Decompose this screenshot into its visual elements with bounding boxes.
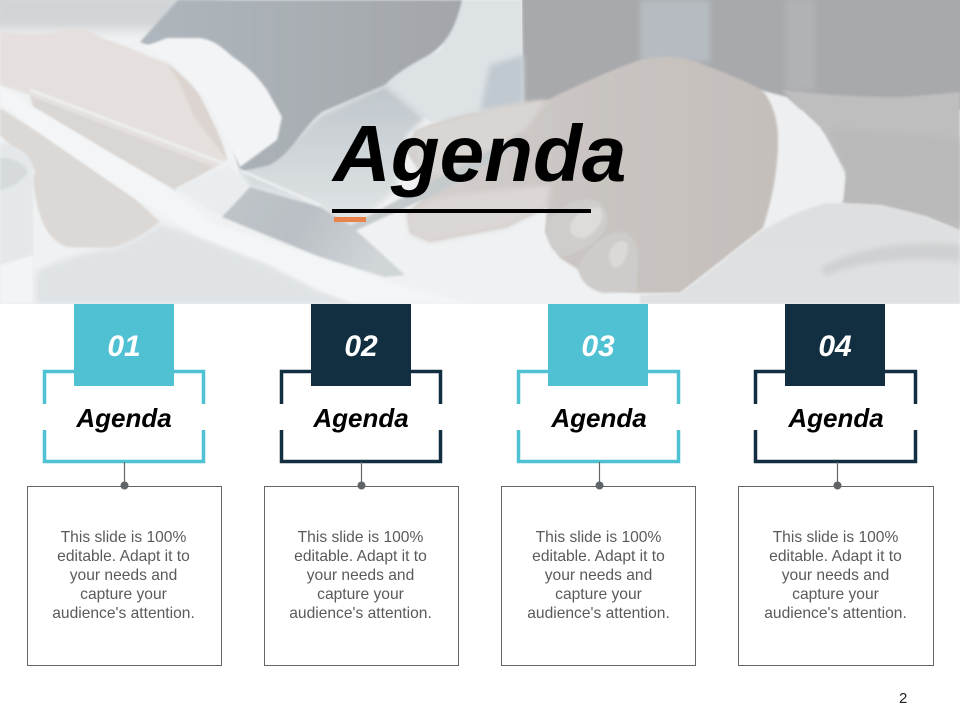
bracket bbox=[516, 370, 680, 464]
title: Agenda: Agenda bbox=[333, 109, 626, 198]
card 02 bbox=[264, 304, 459, 666]
body text: This slide is 100% bbox=[773, 528, 898, 546]
left hand back bbox=[0, 29, 227, 168]
text box bbox=[738, 486, 934, 666]
body text: your needs and bbox=[545, 566, 652, 584]
connector bbox=[120, 462, 128, 490]
card 01 bbox=[27, 304, 222, 666]
label: Agenda bbox=[551, 403, 647, 433]
body text: audience's attention. bbox=[527, 604, 670, 622]
right suit bbox=[782, 90, 960, 232]
hand seen through screen bbox=[30, 95, 215, 190]
bracket bbox=[754, 370, 918, 464]
body text: capture your bbox=[317, 586, 404, 602]
right white cuff bbox=[760, 90, 845, 227]
mid grey surface bbox=[240, 85, 425, 230]
connector bbox=[358, 462, 366, 490]
body text: editable. Adapt it to bbox=[57, 548, 190, 564]
title orange accent bbox=[334, 217, 366, 222]
text box bbox=[501, 486, 696, 666]
lower fingers bbox=[0, 108, 160, 248]
body text bbox=[52, 528, 195, 622]
text box bbox=[264, 486, 459, 666]
number tile: 03 bbox=[581, 330, 615, 363]
body text: your needs and bbox=[70, 566, 177, 584]
number tile bbox=[74, 304, 174, 386]
number tile bbox=[785, 304, 885, 386]
screen dark part bbox=[222, 187, 405, 277]
glass bbox=[0, 143, 33, 304]
title underline bbox=[332, 209, 591, 213]
body text: capture your bbox=[80, 586, 167, 602]
number tile bbox=[548, 304, 648, 386]
label: Agenda bbox=[313, 403, 409, 433]
right hand bbox=[405, 57, 778, 293]
bracket bbox=[280, 370, 442, 464]
number tile bbox=[311, 304, 411, 386]
fingers with nails bbox=[547, 199, 607, 257]
connector bbox=[834, 462, 842, 490]
body text bbox=[527, 528, 670, 622]
body text: editable. Adapt it to bbox=[769, 548, 902, 564]
number tile: 02 bbox=[344, 330, 378, 363]
base / table bbox=[0, 0, 960, 304]
body text: This slide is 100% bbox=[61, 528, 186, 546]
finger highlight bbox=[415, 100, 547, 175]
body text: audience's attention. bbox=[764, 604, 907, 622]
body text bbox=[764, 528, 907, 622]
body text: audience's attention. bbox=[289, 604, 432, 622]
body text: editable. Adapt it to bbox=[294, 548, 427, 564]
table lower left bbox=[36, 224, 360, 304]
body text: your needs and bbox=[782, 566, 889, 584]
body text: This slide is 100% bbox=[298, 528, 423, 546]
bright window strip bbox=[385, 0, 524, 122]
label: Agenda bbox=[788, 403, 884, 433]
suit left bbox=[140, 0, 462, 172]
card 03 bbox=[501, 304, 696, 666]
body text: This slide is 100% bbox=[536, 528, 661, 546]
text box bbox=[27, 486, 222, 666]
body text: your needs and bbox=[307, 566, 414, 584]
inner tablet line bbox=[30, 90, 320, 205]
right sleeve bbox=[640, 203, 960, 304]
body text: capture your bbox=[792, 586, 879, 602]
pen bbox=[348, 134, 524, 232]
left white cuff bbox=[143, 38, 282, 167]
label: Agenda bbox=[76, 403, 172, 433]
background photo: hands with tablet bbox=[0, 0, 960, 304]
body text: audience's attention. bbox=[52, 604, 195, 622]
number tile: 01 bbox=[107, 330, 141, 363]
connector bbox=[596, 462, 604, 490]
body text: editable. Adapt it to bbox=[532, 548, 665, 564]
top right backdrop bbox=[522, 0, 960, 110]
tablet bezel bbox=[0, 85, 470, 304]
body text bbox=[289, 528, 432, 622]
body text: capture your bbox=[555, 586, 642, 602]
screen light part bbox=[175, 165, 250, 217]
page number: 2 bbox=[899, 690, 907, 707]
card 04 bbox=[738, 304, 934, 666]
number tile: 04 bbox=[818, 330, 852, 363]
bracket bbox=[42, 370, 206, 464]
